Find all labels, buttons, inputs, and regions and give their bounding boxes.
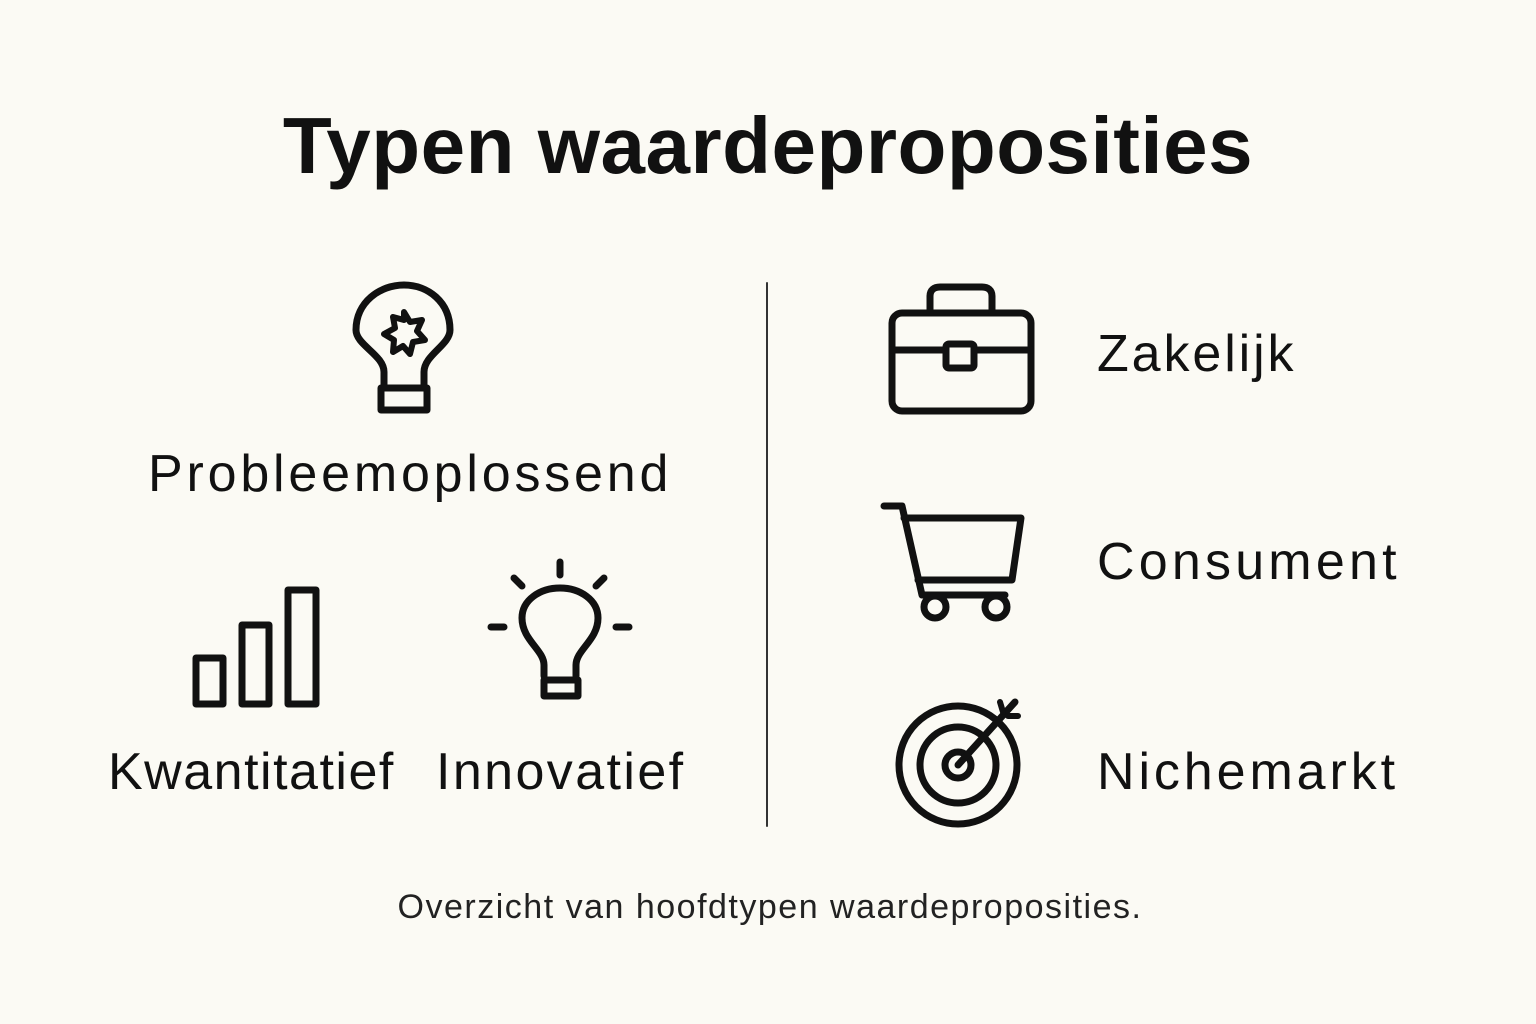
icon: target [899, 702, 1018, 824]
icon: cart [884, 506, 1021, 618]
icon: lightbulb with rays [491, 562, 629, 696]
label: Probleemoplossend: Probleemoplossend [148, 445, 672, 503]
label: Kwantitatief: Kwantitatief [108, 743, 395, 801]
caption: Overzicht van hoofdtypen waardeproposities. [398, 888, 1142, 926]
title: Typen waardeproposities [283, 101, 1253, 190]
label: Innovatief: Innovatief [436, 743, 686, 801]
icon: briefcase [892, 287, 1031, 411]
divider [766, 283, 768, 826]
label: Zakelijk: Zakelijk [1097, 325, 1296, 383]
icon: lightbulb with star [356, 285, 450, 410]
icon: bar chart [196, 590, 316, 704]
label: Nichemarkt: Nichemarkt [1097, 743, 1399, 801]
label: Consument: Consument [1097, 533, 1401, 591]
